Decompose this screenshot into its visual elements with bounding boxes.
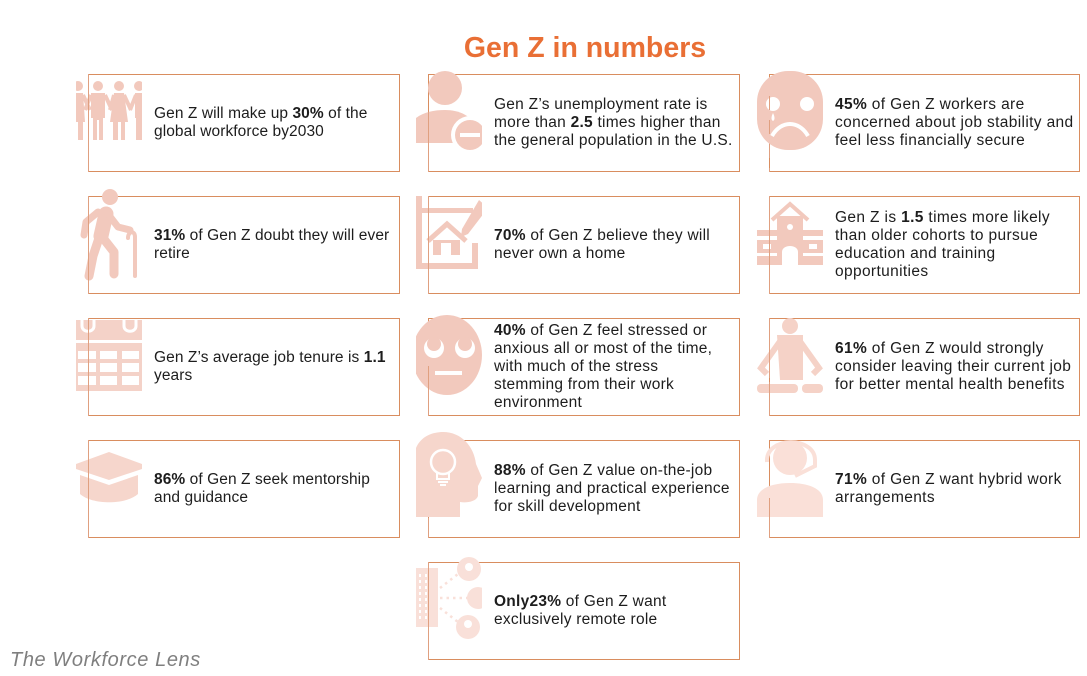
text: mental health <box>835 340 1071 393</box>
text: mentorship: and guidance <box>154 489 248 506</box>
text: mental health: for better mental health benefits <box>835 376 1065 393</box>
panel: job stability <box>757 71 1080 172</box>
panel: remote role <box>416 557 740 660</box>
text: global workforce: global workforce by2030 <box>154 123 324 140</box>
panel: job tenure <box>76 318 400 416</box>
text: on-the-job learning: for skill development <box>494 498 641 515</box>
text: hybrid work: 71% of Gen Z want hybrid work <box>835 471 1062 488</box>
text: stress <box>494 322 712 411</box>
icon: house blueprint with pencil <box>416 196 482 294</box>
panel: on-the-job learning <box>416 432 740 538</box>
icon: person with minus <box>416 71 482 172</box>
icon: eye-rolling face <box>416 315 482 416</box>
text: mental health: consider leaving their current job <box>835 358 1071 375</box>
footer brand: The Workforce Lens <box>10 649 201 671</box>
text: home ownership: never own a home <box>494 245 626 262</box>
text: job tenure: years <box>154 367 192 384</box>
text: education: opportunities <box>835 263 928 280</box>
panel: unemployment <box>416 71 740 172</box>
text: on-the-job learning: 88% of Gen Z value on-the-job <box>494 462 712 479</box>
text: unemployment <box>494 96 733 149</box>
text: job stability: feel less financially secure <box>835 132 1025 149</box>
text: home ownership: 70% of Gen Z believe they will <box>494 227 710 244</box>
text: mentorship: 86% of Gen Z seek mentorship <box>154 471 370 488</box>
text: stress: anxious all or most of the time, <box>494 340 712 357</box>
panel: global workforce <box>76 74 400 172</box>
panel: hybrid work <box>757 440 1080 538</box>
panel: stress <box>416 315 740 416</box>
icon: graduation cap <box>76 440 142 538</box>
icon: meditating person <box>757 318 823 416</box>
icon: person with headset <box>757 440 823 538</box>
icon: group of people <box>76 74 142 172</box>
text: job tenure: Gen Z’s average job tenure is 1.1 <box>154 349 386 366</box>
panel: mental health <box>757 318 1080 416</box>
text: job stability <box>835 96 1074 149</box>
text: mentorship <box>154 471 370 506</box>
text: unemployment: Gen Z’s unemployment rate is <box>494 96 707 113</box>
icon: crying face <box>757 71 823 172</box>
text: education: than older cohorts to pursue <box>835 227 1038 244</box>
text: job stability: 45% of Gen Z workers are <box>835 96 1025 113</box>
text: retirement: retire <box>154 245 190 262</box>
text: job stability: concerned about job stability and <box>835 114 1074 131</box>
text: unemployment: more than 2.5 times higher than <box>494 114 721 131</box>
text: remote role: exclusively remote role <box>494 611 657 628</box>
text: hybrid work <box>835 471 1062 506</box>
text: hybrid work: arrangements <box>835 489 935 506</box>
text: stress: stemming from their work <box>494 376 674 393</box>
text: home ownership <box>494 227 710 262</box>
panel: education <box>757 196 1080 294</box>
text: retirement: 31% of Gen Z doubt they will ever <box>154 227 389 244</box>
text: job tenure <box>154 349 386 384</box>
icon: head with light bulb <box>416 432 482 538</box>
text: retirement <box>154 227 389 262</box>
icon: school building <box>757 196 823 294</box>
text: stress: environment <box>494 394 582 411</box>
text: on-the-job learning <box>494 462 730 515</box>
text: education <box>835 209 1050 280</box>
text: global workforce <box>154 105 367 140</box>
text: remote role: Only23% of Gen Z want <box>494 593 666 610</box>
icon: elderly person with cane <box>80 189 137 294</box>
icon: calendar <box>76 318 142 416</box>
title: Gen Z in numbers <box>464 32 706 64</box>
text: stress: with much of the stress <box>494 358 658 375</box>
text: global workforce: Gen Z will make up 30% of the <box>154 105 367 122</box>
text: stress: 40% of Gen Z feel stressed or <box>494 322 707 339</box>
text: education: Gen Z is 1.5 times more likely <box>835 209 1050 226</box>
text: remote role <box>494 593 666 628</box>
text: on-the-job learning: learning and practical experience <box>494 480 730 497</box>
icon: office connected to remote workers <box>416 557 482 660</box>
text: education: education and training <box>835 245 995 262</box>
panel: retirement <box>80 189 400 294</box>
panel: mentorship <box>76 440 400 538</box>
text: unemployment: the general population in the U.S. <box>494 132 733 149</box>
text: mental health: 61% of Gen Z would strongly <box>835 340 1044 357</box>
panel: home ownership <box>416 196 740 294</box>
